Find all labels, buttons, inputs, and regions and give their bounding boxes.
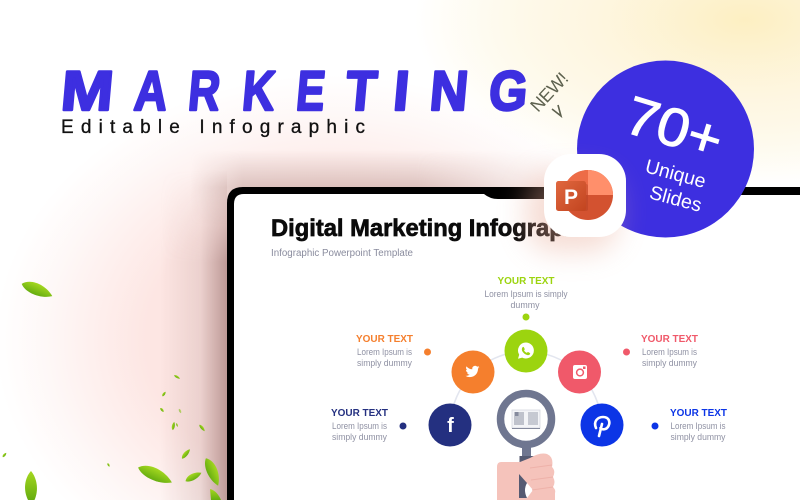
label: left orange: YOUR TEXT [356, 333, 414, 345]
magnifier with hand [497, 394, 555, 500]
label: right red: simply dummy [642, 358, 698, 368]
leaves [2, 278, 223, 500]
laptop frame [227, 187, 800, 500]
connecting arc [450, 351, 602, 425]
label: top green: dummy [510, 300, 540, 310]
title: MARKETING: T [343, 61, 380, 123]
powerpoint icon glow [526, 172, 618, 252]
label: left orange: simply dummy [357, 358, 413, 368]
node: whatsapp [504, 330, 548, 372]
label: top green: YOUR TEXT [498, 275, 555, 287]
badge: 70+ unique slides: Slides [647, 182, 704, 217]
label: top green: Lorem Ipsum is simply [484, 289, 568, 299]
title: MARKETING: R [186, 59, 223, 122]
label: right blue: YOUR TEXT [670, 407, 728, 419]
slide heading: Digital Marketing Infographic [271, 215, 598, 242]
slide heading: Infographic Powerpoint Template [271, 248, 413, 259]
label: left navy: Lorem Ipsum is [332, 421, 388, 431]
label: right red [641, 333, 699, 368]
title: MARKETING [59, 59, 530, 123]
node: pinterest [580, 404, 624, 446]
label: left orange: Lorem Ipsum is [357, 347, 413, 357]
node: facebook: f [447, 415, 454, 437]
label: top green [484, 275, 568, 310]
label: left orange [356, 333, 414, 368]
title: MARKETING: M [59, 59, 116, 122]
label: right blue: Lorem Ipsum is [670, 421, 726, 431]
title: MARKETING: N [427, 60, 471, 122]
label: left navy [331, 407, 389, 442]
badge: 70+ unique slides: Unique [643, 156, 708, 193]
title: MARKETING: A [132, 60, 171, 122]
slide heading [271, 215, 598, 259]
badge: 70+ unique slides: 70+ [618, 85, 730, 171]
label: left navy: YOUR TEXT [331, 407, 389, 419]
node: facebook [428, 404, 472, 446]
label: right red: YOUR TEXT [641, 333, 699, 345]
node: instagram [558, 350, 601, 394]
powerpoint app icon: P [564, 186, 578, 209]
powerpoint app icon [544, 154, 626, 237]
subtitle: Editable Infographic [61, 117, 365, 138]
label: right blue [670, 407, 728, 442]
label: right blue: simply dummy [670, 432, 726, 442]
title: MARKETING: E [294, 59, 328, 122]
new badge: NEW! [526, 68, 572, 116]
hand [497, 454, 555, 500]
label: right red: Lorem Ipsum is [642, 347, 698, 357]
node: twitter [452, 350, 494, 394]
badge: 70+ unique slides [577, 60, 754, 238]
connector dots [400, 314, 658, 430]
open book icon [512, 410, 540, 429]
title: MARKETING: I [391, 59, 412, 122]
title: MARKETING: K [240, 59, 278, 122]
title: MARKETING: G [486, 60, 530, 123]
label: left navy: simply dummy [332, 432, 388, 442]
